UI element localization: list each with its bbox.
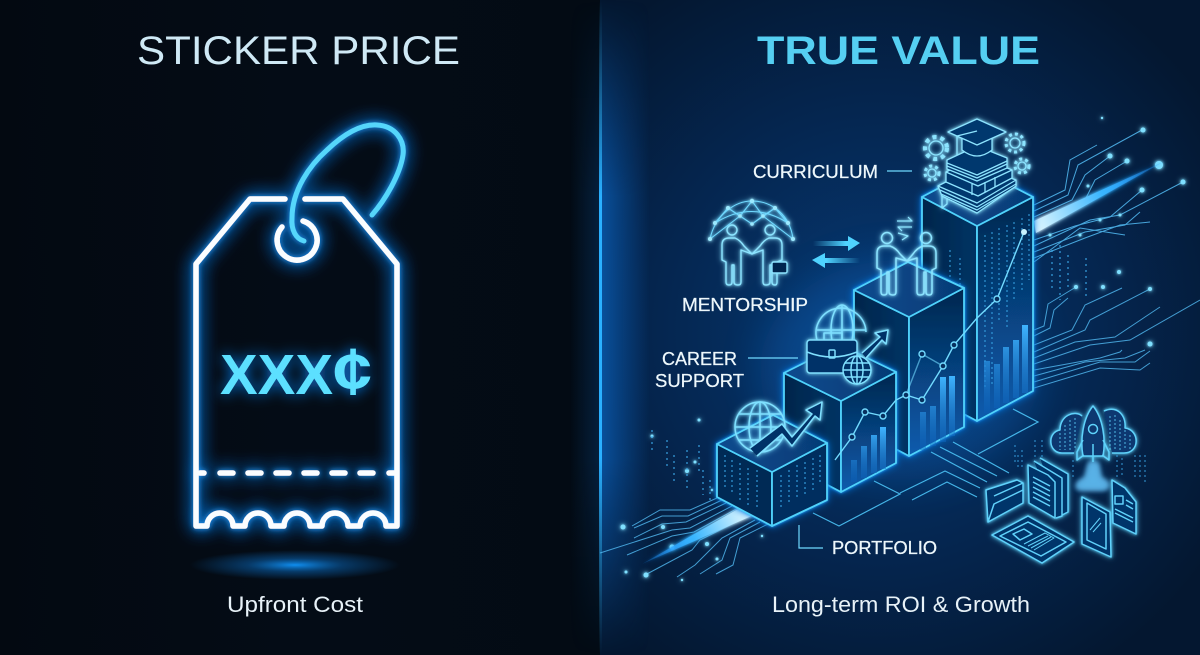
icon: career globe, briefcase and arrow (807, 305, 888, 384)
arrows between mentorship and platform (812, 236, 860, 268)
middle book (946, 156, 1012, 196)
arrow: right (813, 236, 860, 251)
icon: neon price tag (196, 125, 403, 526)
column: mentorship (854, 262, 964, 456)
column: portfolio data (725, 455, 820, 510)
column: curriculum (922, 168, 1033, 421)
upright tablet (1082, 497, 1111, 557)
label: career support: SUPPORT (655, 371, 744, 391)
growth line (835, 229, 1027, 460)
heading: sticker price: STICKER PRICE (137, 29, 460, 73)
price: XXX (220, 343, 333, 407)
label: mentorship: MENTORSHIP (682, 295, 808, 315)
platform traces (813, 409, 1038, 526)
caption: upfront cost: Upfront Cost (227, 592, 363, 617)
label: career support (655, 349, 798, 391)
circuit nodes (620, 117, 1186, 581)
center divider glow (576, 7, 646, 648)
circuit traces: upper right (1034, 130, 1183, 262)
string (292, 125, 403, 241)
column: mentorship bars (920, 376, 955, 450)
column: curriculum data and bars (950, 214, 1029, 413)
bottom book (938, 166, 1016, 213)
panel: right background (600, 0, 1200, 655)
stacked documents (1040, 458, 1068, 516)
right document (1112, 480, 1136, 534)
column: career support (784, 345, 896, 492)
ambient glow behind stairs (760, 260, 1040, 480)
beam: lower left (642, 505, 756, 564)
tear line (200, 470, 394, 476)
cap (962, 138, 992, 156)
price (220, 334, 372, 408)
label: curriculum: CURRICULUM (753, 162, 878, 182)
label: portfolio (799, 525, 937, 558)
flame (1076, 462, 1109, 490)
column: portfolio (717, 415, 827, 526)
tag outline (196, 199, 397, 526)
heading: true value: TRUE VALUE (757, 29, 1040, 73)
floor glow (190, 550, 400, 580)
flat tablet (992, 516, 1074, 563)
cloud (1051, 409, 1136, 453)
top book (947, 146, 1007, 181)
circuit traces: lower left (600, 498, 768, 577)
icon: mentorship network and figures (708, 199, 795, 285)
label: portfolio: PORTFOLIO (832, 538, 937, 558)
beam: upper right (1034, 161, 1165, 233)
column: career support bars (851, 427, 886, 482)
rocket (1082, 406, 1104, 456)
digital rain: around documents (1015, 440, 1145, 482)
label: career support: CAREER (662, 349, 737, 369)
panel: left background (0, 0, 600, 655)
icon cluster: rocket, cloud and documents (986, 406, 1136, 563)
price: ¢ (333, 334, 372, 408)
gears (929, 141, 943, 155)
icon: graduation cap, books and gears (925, 119, 1029, 213)
arrow: left (812, 253, 860, 268)
digital rain: left (652, 245, 1086, 500)
tag eyelet (277, 221, 317, 260)
caption: long-term roi: Long-term ROI & Growth (772, 592, 1030, 617)
circuit traces: lower right (1034, 287, 1200, 388)
icon: portfolio globe and growth arrow (735, 402, 822, 456)
folder (986, 480, 1023, 522)
icon: top handshake (877, 217, 936, 295)
